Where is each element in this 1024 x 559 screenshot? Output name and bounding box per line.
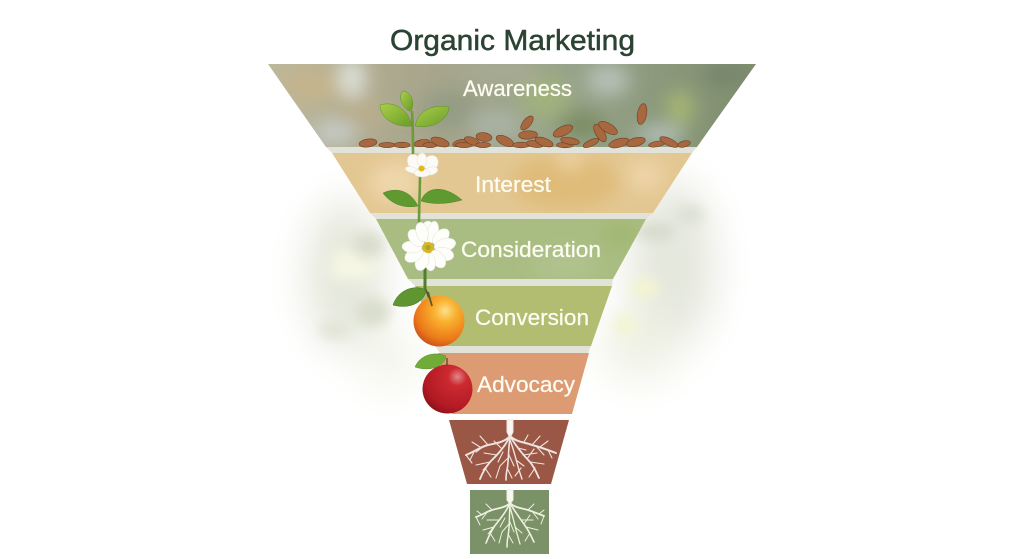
- panel: green roots block: [470, 490, 549, 554]
- label: Consideration: Consideration: [461, 237, 601, 262]
- icon: small white flower: [404, 152, 441, 177]
- label: Conversion: Conversion: [475, 305, 589, 330]
- panel: brown roots block: [449, 420, 569, 484]
- label: Awareness: Awareness: [463, 76, 572, 101]
- blurred foliage background: [307, 180, 714, 390]
- icon: daisy: [402, 220, 457, 273]
- icon: white roots: [466, 420, 556, 480]
- icon: plant stem: [412, 112, 432, 306]
- funnel band: Awareness: [268, 58, 756, 147]
- icon: red apple: [415, 354, 472, 414]
- funnel band: Conversion: [415, 286, 612, 346]
- icon: lower stem leaves: [383, 189, 462, 207]
- icon: white roots: [476, 490, 544, 547]
- funnel gap strips: [326, 147, 697, 353]
- seeds: [359, 103, 691, 150]
- funnel band: Consideration: [376, 219, 646, 279]
- icon: sprout leaves: [380, 91, 449, 127]
- label: Advocacy: Advocacy: [477, 372, 575, 397]
- band labels: [461, 76, 601, 397]
- title: Organic Marketing: [390, 25, 635, 57]
- icon: orange fruit: [393, 288, 464, 346]
- label: Interest: Interest: [475, 172, 551, 197]
- funnel band: Advocacy: [438, 353, 589, 414]
- funnel band: Interest: [332, 152, 692, 213]
